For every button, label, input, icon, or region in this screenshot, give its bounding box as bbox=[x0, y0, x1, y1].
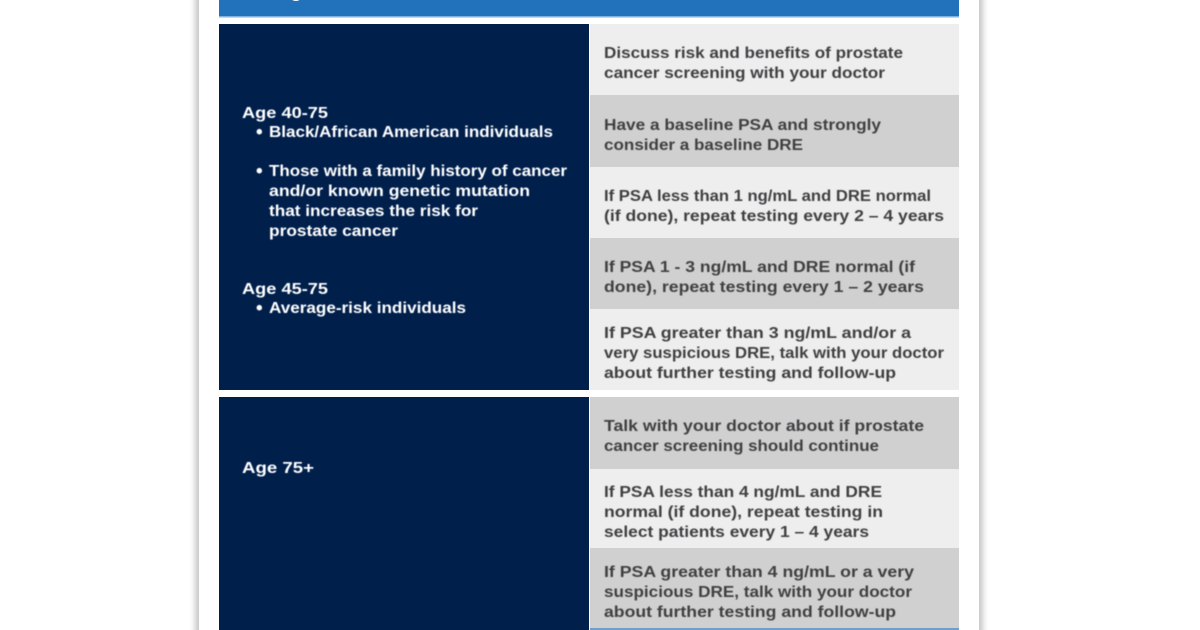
recommendation: baseline PSA: consider a baseline DRE bbox=[604, 137, 803, 154]
panel: age 75+ bbox=[219, 397, 589, 630]
recommendation: discuss risks bbox=[590, 24, 959, 95]
recommendation: PSA over 4: about further testing and follow-up bbox=[604, 604, 896, 621]
header bar bbox=[219, 0, 959, 18]
risk group: Black/African American: • bbox=[256, 122, 263, 143]
recommendation: PSA under 4: If PSA less than 4 ng/mL and DRE bbox=[604, 484, 882, 501]
recommendation: PSA under 4 bbox=[590, 469, 959, 548]
recommendation: PSA under 4: normal (if done), repeat testing in bbox=[604, 504, 883, 521]
recommendation: PSA 1-3: If PSA 1 - 3 ng/mL and DRE normal (if bbox=[604, 259, 916, 276]
panel: ages 40-75 bbox=[219, 24, 589, 390]
risk group: family history: and/or known genetic mutation bbox=[269, 183, 530, 200]
recommendation: PSA under 4: select patients every 1 – 4 years bbox=[604, 524, 869, 541]
card shadow bbox=[195, 0, 983, 630]
recommendation: discuss risks: cancer screening with your doctor bbox=[604, 65, 885, 82]
heading: age 45-75: Age 45-75 bbox=[242, 281, 328, 298]
recommendation: continue screening: cancer screening should continue bbox=[604, 438, 879, 455]
recommendation: baseline PSA bbox=[590, 95, 959, 167]
risk group: family history: prostate cancer bbox=[269, 223, 398, 240]
recommendation: PSA over 4 bbox=[590, 548, 959, 629]
card background bbox=[199, 0, 979, 630]
recommendation: PSA over 4: suspicious DRE, talk with your doctor bbox=[604, 584, 912, 601]
risk group: average risk bbox=[256, 298, 466, 319]
recommendation: PSA under 1: If PSA less than 1 ng/mL and DRE normal bbox=[604, 188, 931, 205]
recommendation: PSA over 3: If PSA greater than 3 ng/mL and/or a bbox=[604, 325, 911, 342]
recommendation: PSA under 1: (if done), repeat testing every 2 – 4 years bbox=[604, 208, 944, 225]
recommendation: PSA 1-3 bbox=[590, 238, 959, 309]
recommendation: PSA under 1 bbox=[590, 167, 959, 238]
recommendation: discuss risks: Discuss risk and benefits of prostate bbox=[604, 45, 903, 62]
panel: age 75+: Age 75+ bbox=[242, 460, 314, 477]
recommendation: baseline PSA: Have a baseline PSA and strongly bbox=[604, 117, 881, 134]
bottom blue rule bbox=[590, 628, 959, 630]
risk group: family history: Those with a family history of cancer bbox=[269, 163, 567, 180]
risk group: family history: that increases the risk for bbox=[269, 203, 478, 220]
risk group: average risk: Average-risk individuals bbox=[269, 300, 466, 317]
risk group: Black/African American: Black/African American individuals bbox=[269, 124, 553, 141]
recommendation: PSA over 3: about further testing and follow-up bbox=[604, 365, 896, 382]
recommendation: PSA over 3: very suspicious DRE, talk with your doctor bbox=[604, 345, 944, 362]
recommendation: continue screening bbox=[590, 397, 959, 469]
recommendation: PSA 1-3: done), repeat testing every 1 – 2 years bbox=[604, 279, 924, 296]
risk group: family history bbox=[256, 161, 567, 240]
recommendation: PSA over 4: If PSA greater than 4 ng/mL or a very bbox=[604, 564, 914, 581]
risk group: average risk: • bbox=[256, 298, 263, 319]
risk group: family history: • bbox=[256, 161, 263, 182]
recommendation: continue screening: Talk with your doctor about if prostate bbox=[604, 418, 924, 435]
recommendation: PSA over 3 bbox=[590, 309, 959, 390]
heading: age 40-75: Age 40-75 bbox=[242, 105, 328, 122]
